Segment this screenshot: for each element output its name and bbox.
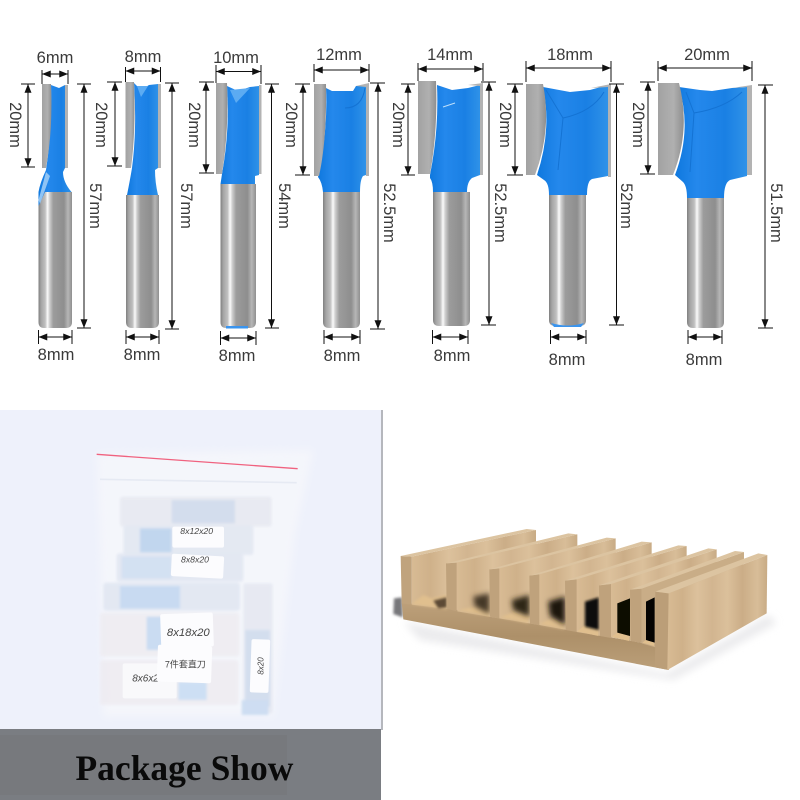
width dimension xyxy=(125,48,161,82)
width dimension: 20mm xyxy=(684,46,730,64)
overall length dimension: 52mm xyxy=(617,183,635,229)
router bit 3: 10mm xyxy=(185,49,293,365)
width dimension xyxy=(658,46,752,81)
blue cutter body xyxy=(220,86,259,184)
blue cutter body xyxy=(430,85,480,192)
width dimension: 10mm xyxy=(213,49,259,67)
flute length dimension xyxy=(496,84,523,175)
shank dimension xyxy=(38,330,74,364)
shank dimension: 8mm xyxy=(38,346,74,364)
carbide tips xyxy=(418,81,436,174)
shank dimension: 8mm xyxy=(549,351,585,369)
panel: grooved wood sample xyxy=(393,529,777,680)
carbide tips xyxy=(42,84,51,168)
box labels xyxy=(123,526,270,698)
flute length dimension: 20mm xyxy=(389,102,407,148)
carbide tips xyxy=(658,83,684,175)
shank xyxy=(323,192,360,328)
blue cutter body xyxy=(675,87,747,198)
last rib top xyxy=(655,553,767,593)
base front face xyxy=(402,603,669,670)
width dimension: 8mm xyxy=(125,48,161,66)
flute length dimension xyxy=(629,82,655,174)
shank dimension: 8mm xyxy=(686,351,722,369)
overall length dimension xyxy=(265,84,293,328)
last rib front face xyxy=(655,592,669,670)
router bit 1: 6mm xyxy=(6,49,104,364)
flute length dimension xyxy=(389,84,415,175)
blue cutter body xyxy=(38,85,72,206)
flute length dimension: 20mm xyxy=(92,102,110,148)
overall length dimension: 52.5mm xyxy=(491,183,509,243)
blue cutter body xyxy=(537,85,608,195)
overall length dimension xyxy=(758,85,785,328)
flute length dimension: 20mm xyxy=(185,102,203,148)
width dimension: 18mm xyxy=(547,46,593,64)
flute length dimension: 20mm xyxy=(282,102,300,148)
overall length dimension xyxy=(609,84,635,325)
flute length dimension xyxy=(282,84,310,175)
right side face xyxy=(667,555,767,670)
shank dimension: 8mm xyxy=(219,347,255,365)
width dimension xyxy=(314,46,369,82)
groove walls and rib tops xyxy=(401,529,744,647)
shank dimension xyxy=(686,330,722,369)
bagged boxes xyxy=(100,497,273,715)
box labels: 8x20 xyxy=(256,657,265,675)
caption band xyxy=(0,729,381,800)
shank dimension: 8mm xyxy=(434,347,470,365)
plastic bag xyxy=(97,450,313,717)
router bit 6: 18mm xyxy=(496,46,635,369)
shank xyxy=(433,192,470,326)
overall length dimension xyxy=(165,83,195,329)
width dimension: 12mm xyxy=(316,46,362,64)
router bit 5: 14mm xyxy=(389,46,509,365)
overall length dimension: 57mm xyxy=(86,183,104,229)
box labels: 8x18x20 xyxy=(167,627,210,639)
shank dimension: 8mm xyxy=(324,347,360,365)
width dimension xyxy=(526,46,611,82)
box labels: 8x8x20 xyxy=(181,555,209,565)
overall length dimension: 51.5mm xyxy=(767,183,785,243)
shank dimension xyxy=(124,330,160,364)
carbide tips xyxy=(216,83,227,174)
shank xyxy=(38,192,72,328)
width dimension xyxy=(213,49,261,84)
carbide tips xyxy=(126,82,135,168)
blue cutter body xyxy=(127,83,158,195)
box labels: 7件套直刀 xyxy=(165,658,206,669)
shank xyxy=(549,195,586,326)
flute length dimension: 20mm xyxy=(496,102,514,148)
overall length dimension: 54mm xyxy=(275,183,293,229)
overall length dimension xyxy=(481,82,509,325)
box labels: 8x12x20 xyxy=(180,526,213,536)
caption: Package Show: Package Show xyxy=(76,748,294,788)
shank dimension xyxy=(432,330,470,365)
flute length dimension xyxy=(6,84,35,167)
flute length dimension: 20mm xyxy=(6,102,24,148)
flute length dimension: 20mm xyxy=(629,102,647,148)
shank dimension xyxy=(549,330,586,369)
shank dimension: 8mm xyxy=(124,346,160,364)
overall length dimension xyxy=(370,83,398,329)
overall length dimension: 52.5mm xyxy=(380,183,398,243)
overall length dimension xyxy=(77,84,104,328)
box labels: 8x6x20 xyxy=(132,674,165,685)
shank xyxy=(687,198,724,328)
width dimension xyxy=(37,49,73,84)
shank dimension xyxy=(324,330,360,365)
shank dimension xyxy=(219,331,256,365)
carbide tips xyxy=(526,84,546,175)
zip seal xyxy=(100,479,297,483)
width dimension xyxy=(418,46,483,81)
tear strip xyxy=(97,454,298,469)
panel: package photo xyxy=(0,410,383,730)
ground shadow xyxy=(403,615,777,680)
shank xyxy=(220,184,256,328)
router bit 2: 8mm xyxy=(92,48,195,364)
flute length dimension xyxy=(185,82,214,173)
overall length dimension: 57mm xyxy=(177,183,195,229)
router bit 4: 12mm xyxy=(282,46,398,365)
width dimension: 14mm xyxy=(427,46,473,64)
shank xyxy=(126,195,159,328)
width dimension: 6mm xyxy=(37,49,73,67)
router bit 7: 20mm xyxy=(629,46,785,369)
carbide tips xyxy=(314,84,326,176)
blue cutter body xyxy=(318,86,366,192)
flute length dimension xyxy=(92,82,122,166)
